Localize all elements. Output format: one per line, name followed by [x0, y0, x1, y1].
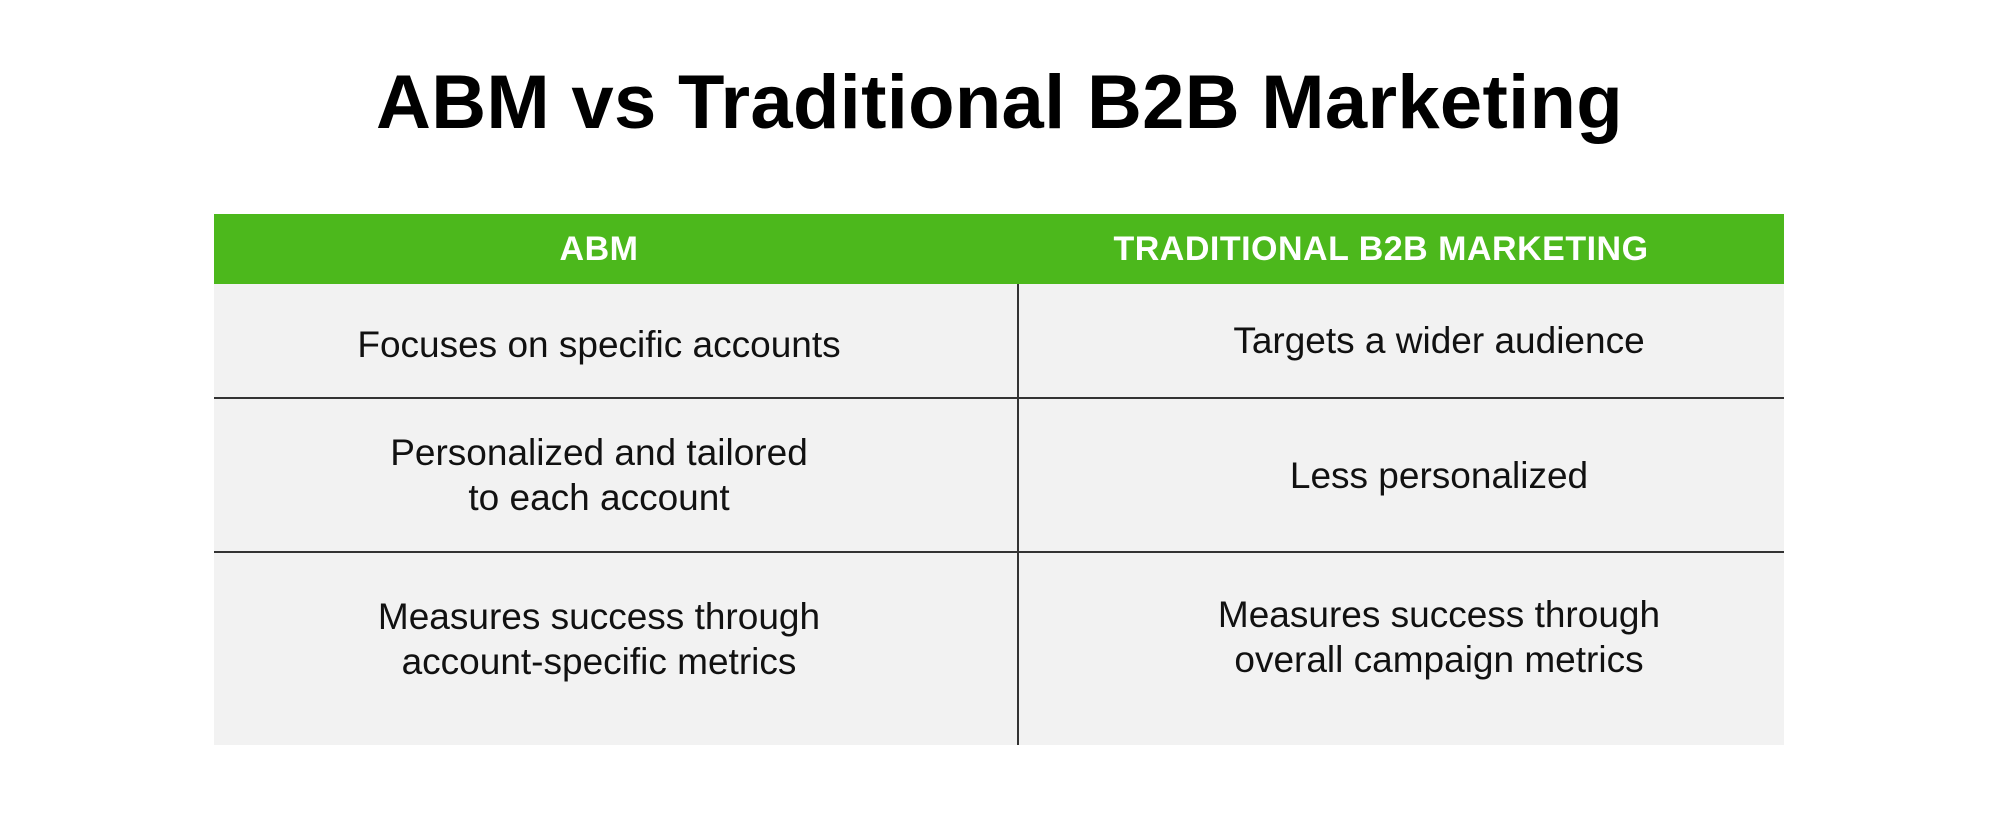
row 2 left	[390, 432, 808, 518]
row 2 left: Personalized and tailored	[390, 432, 808, 473]
row 3 left: account-specific metrics	[402, 641, 796, 682]
row 3 left: Measures success through	[378, 596, 820, 637]
header: traditional: TRADITIONAL B2B MARKETING	[1113, 230, 1649, 268]
row 1 left: Focuses on specific accounts	[357, 324, 841, 365]
row 3 left	[378, 596, 820, 682]
row 2 right: Less personalized	[1290, 454, 1588, 496]
row 3 right: overall campaign metrics	[1234, 639, 1644, 680]
header: ABM: ABM	[560, 230, 638, 268]
row 3 right: Measures success through	[1218, 594, 1660, 635]
row 2 left: to each account	[468, 477, 730, 518]
header bar	[214, 214, 1784, 284]
comparison table	[214, 214, 1784, 745]
title: ABM vs Traditional B2B Marketing	[376, 60, 1623, 145]
row 1 right: Targets a wider audience	[1233, 320, 1645, 361]
row 3 right	[1218, 594, 1660, 680]
